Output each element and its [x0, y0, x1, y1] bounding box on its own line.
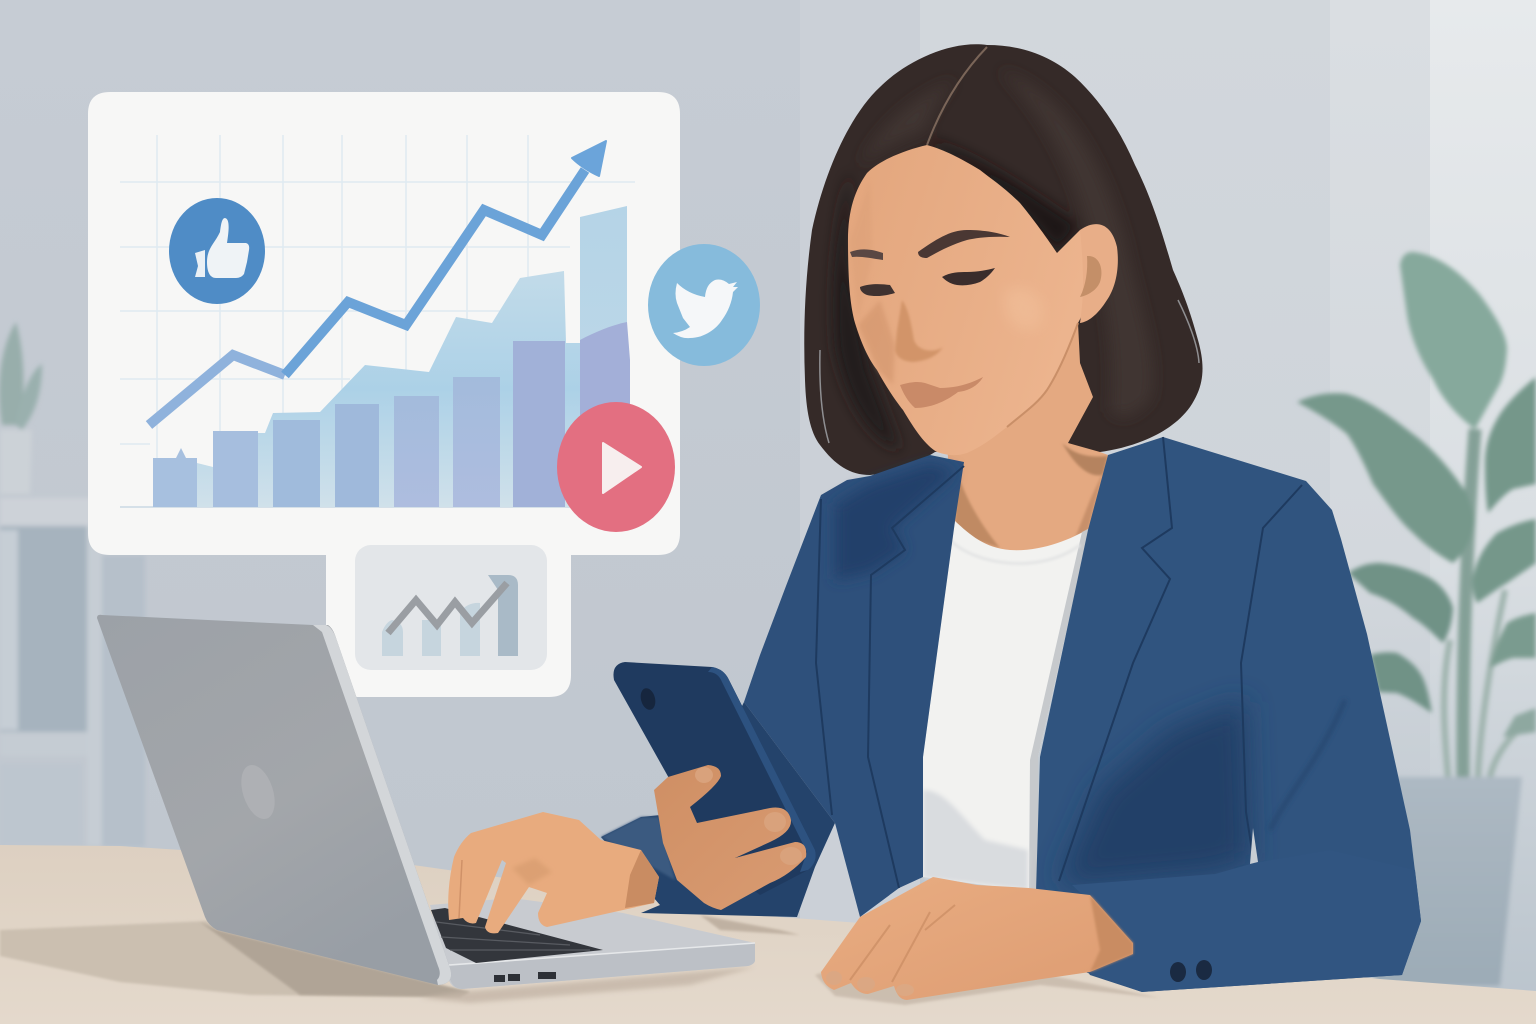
hand typing on laptop [448, 812, 659, 933]
background shelf [0, 498, 145, 847]
brows [918, 230, 1010, 258]
blazer left side [744, 455, 964, 917]
blazer collar shadow [835, 464, 955, 580]
phone camera [638, 687, 658, 711]
neck [947, 323, 1108, 565]
laptop base [430, 898, 755, 989]
laptop logo [235, 761, 281, 823]
hair back [804, 44, 1203, 475]
shirt [923, 521, 1090, 892]
desk shadow [0, 921, 470, 997]
hand holding phone [654, 765, 806, 910]
blazer torso shadow [1060, 700, 1250, 885]
nose [895, 300, 943, 362]
blazer right side [1036, 437, 1421, 992]
lips [900, 377, 983, 408]
card background [88, 92, 680, 697]
chart grid [120, 135, 635, 507]
face shading [850, 180, 872, 320]
desk [0, 845, 1536, 1024]
eyes [942, 268, 995, 285]
plant pot [1375, 777, 1522, 986]
keyboard [431, 908, 603, 963]
hair gap slits [820, 300, 1199, 443]
person [601, 44, 1421, 992]
bar chart [153, 206, 630, 507]
blazer arm sleeve [601, 702, 835, 917]
icon: video play [557, 402, 675, 532]
area chart [197, 271, 580, 507]
icon: like thumb [169, 198, 265, 304]
plant leaves [1400, 252, 1507, 429]
hand resting on desk [821, 877, 1133, 1000]
laptop [97, 615, 755, 989]
background plant [1297, 252, 1536, 986]
blazer [601, 437, 1421, 992]
laptop lid [97, 615, 451, 985]
icon: twitter bird [648, 244, 760, 366]
trend line arrow [149, 141, 606, 425]
ear [1080, 224, 1118, 323]
background small plant [0, 322, 42, 494]
lapel seams [816, 437, 1302, 888]
phone [613, 662, 816, 895]
plant stems [1463, 429, 1475, 777]
hair part line [927, 47, 987, 145]
face [848, 145, 1118, 455]
sleeve fold [1270, 700, 1345, 830]
panel: floating analytics card [88, 92, 760, 697]
jacket sleeve forearm [1072, 850, 1421, 992]
laptop ports [494, 972, 556, 982]
cuff buttons [1170, 960, 1212, 982]
mini chart card [355, 545, 547, 670]
hair highlights [833, 70, 1153, 450]
